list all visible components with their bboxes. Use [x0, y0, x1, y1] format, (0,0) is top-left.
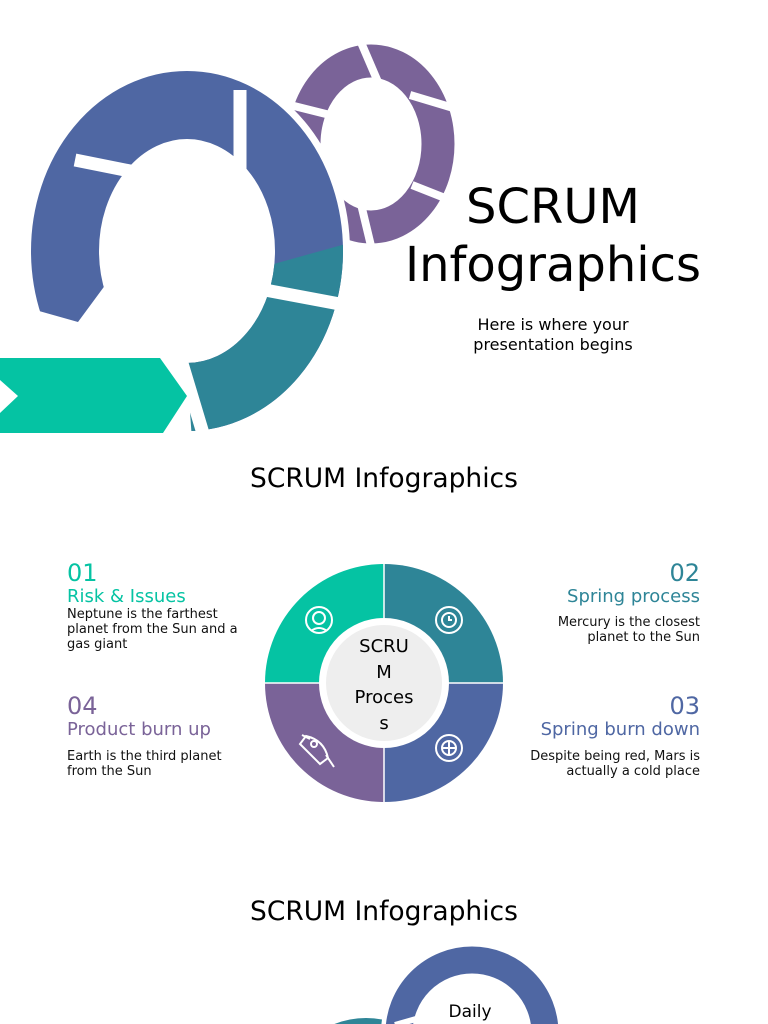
icon: globe — [436, 735, 462, 761]
text block: 02: planet to the Sun — [587, 630, 700, 645]
text block: 03: actually a cold place — [566, 764, 700, 779]
title: SCRUM — [466, 179, 640, 235]
text: center label: M — [376, 662, 392, 683]
text: center label: Proces — [355, 687, 413, 708]
arrow: green chevron — [0, 358, 187, 433]
text block: 04: Product burn up — [67, 719, 211, 740]
text block: 03: 03 — [669, 692, 700, 720]
text block: 02: Spring process — [567, 586, 700, 607]
text block: 04: Earth is the third planet — [67, 749, 222, 764]
icon: big blue cycle ring — [0, 90, 345, 440]
heading: section 2: SCRUM Infographics — [250, 463, 518, 494]
text block: 01 — [67, 559, 238, 652]
text block: 03: Spring burn down — [541, 719, 700, 740]
icon: rocket — [300, 735, 334, 767]
text block: 02 — [558, 559, 700, 645]
heading: section 3: SCRUM Infographics — [250, 896, 518, 927]
text block: 04 — [67, 692, 222, 779]
text block: 01: 01 — [67, 559, 98, 587]
chart: daily cycle rings — [334, 946, 558, 1024]
text block: 01: Neptune is the farthest planet from the Sun and a gas giant — [67, 607, 238, 652]
subtitle — [473, 315, 633, 354]
icon: money — [306, 607, 332, 633]
subtitle: Here is where your — [477, 315, 629, 334]
text block: 02: 02 — [669, 559, 700, 587]
title: Infographics — [405, 237, 701, 293]
hero graphic: cycle rings — [0, 44, 454, 433]
text block: 01: Risk & Issues — [67, 586, 186, 607]
chart: scrum process donut — [265, 564, 503, 802]
icon: clock — [436, 607, 462, 633]
text block: 02: Mercury is the closest — [558, 615, 700, 630]
text: center label: SCRU — [359, 636, 409, 657]
text: center label: s — [379, 713, 389, 734]
icon: purple small cycle ring — [290, 40, 460, 250]
text block: 04: 04 — [67, 692, 98, 720]
title — [405, 179, 701, 293]
subtitle: presentation begins — [473, 335, 633, 354]
text: Daily: Daily — [448, 1002, 492, 1022]
text block: 03: Despite being red, Mars is — [530, 749, 700, 764]
text block: 04: from the Sun — [67, 764, 152, 779]
text block: 03 — [530, 692, 700, 779]
